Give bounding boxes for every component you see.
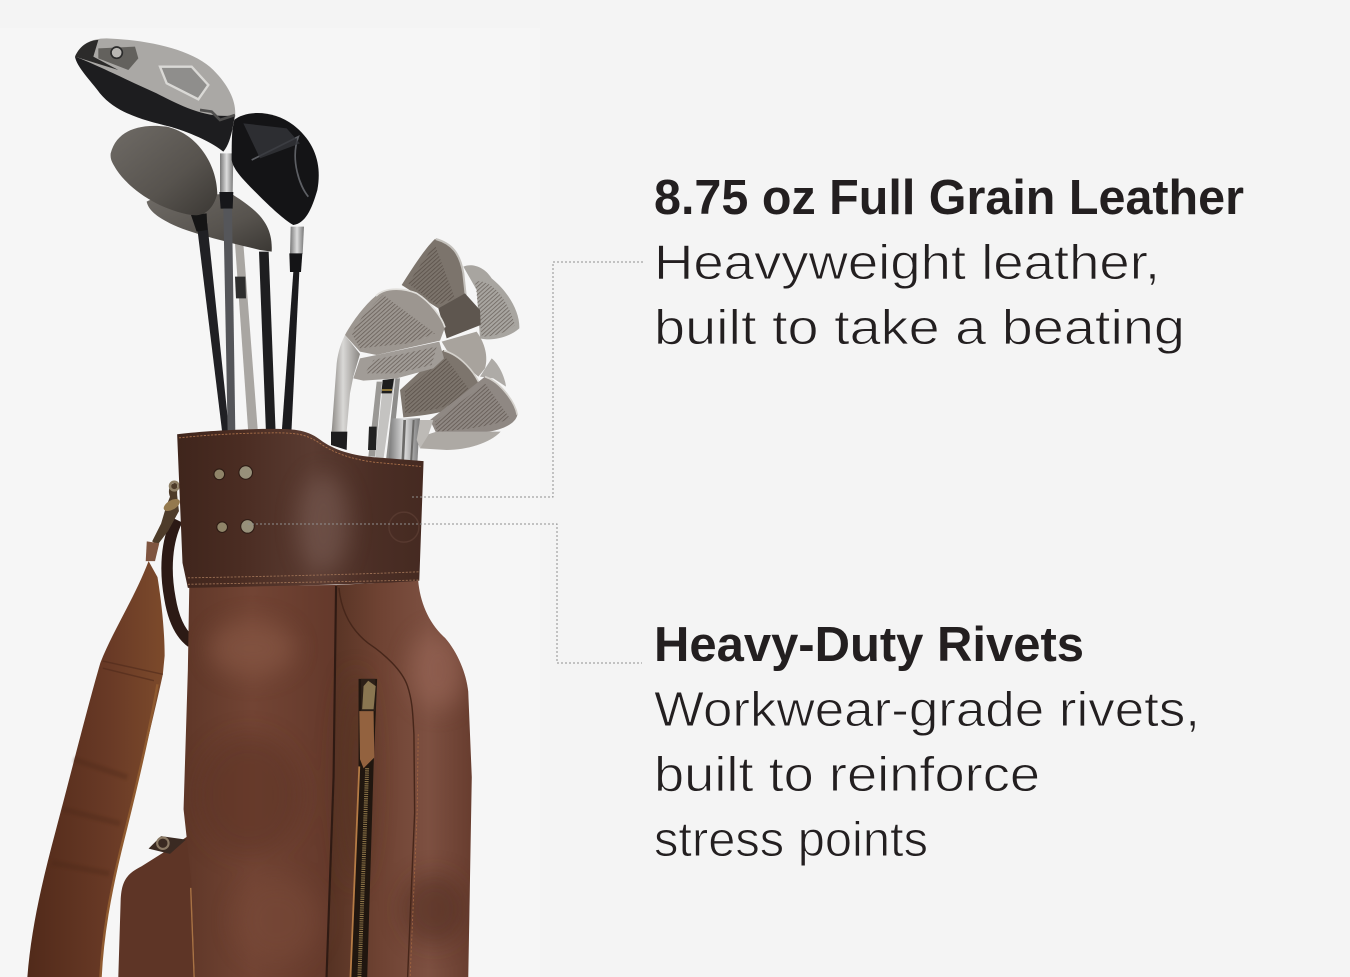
collar top stitching: [179, 433, 421, 466]
bag body left panel: [184, 585, 336, 977]
flap seam: [339, 588, 415, 977]
front wedge hosel black tip: [331, 432, 347, 450]
leather collar: [177, 429, 424, 588]
thin back wedge: [480, 358, 506, 387]
silver shaft band: [235, 277, 246, 298]
shoulder strap: [27, 561, 165, 977]
front wedge hosel: [332, 335, 360, 432]
leader line: leather: [412, 262, 645, 497]
rear right wedge: [463, 265, 519, 339]
golf bag: [27, 429, 472, 977]
leather mottling: [195, 620, 466, 963]
callout: heavy-duty rivets: [654, 618, 1200, 867]
collar highlight: [299, 474, 349, 574]
heading: rivets: Heavy-Duty Rivets: [654, 618, 1084, 672]
leader line: rivets: [248, 524, 642, 663]
side stitching: [410, 734, 418, 977]
brass clasp: [146, 482, 182, 561]
golf clubs: [75, 38, 319, 433]
driver head: [75, 38, 235, 152]
bottom wedge: [420, 432, 501, 450]
mid silver wedge: [442, 332, 486, 377]
description: rivets line 2: built to reinforce: [654, 748, 1040, 802]
callout: full grain leather: [654, 171, 1244, 355]
front wedge lower face: [353, 342, 444, 381]
side pocket: [118, 836, 195, 977]
rivets: [214, 466, 254, 533]
rear top wedge: [402, 239, 466, 308]
driver shaft: [219, 153, 235, 433]
collar logo stamp: [389, 512, 419, 542]
description: rivets line 1: Workwear-grade rivets,: [654, 683, 1200, 737]
black fairway wood: [232, 113, 319, 433]
zipper pull tab: [359, 711, 374, 768]
zipper: [350, 679, 377, 977]
wedge irons: [331, 239, 519, 463]
bag body right panel: [327, 581, 472, 977]
front wedge upper face: [345, 289, 445, 355]
center fold line: [326, 586, 336, 977]
description: leather line 2: built to take a beating: [654, 301, 1185, 355]
silver shaft: [235, 243, 258, 433]
description: leather line 1: Heavyweight leather,: [654, 236, 1160, 290]
shafts under wedges: [368, 378, 420, 463]
bottom wedge neck: [417, 420, 433, 448]
heading: leather: 8.75 oz Full Grain Leather: [654, 171, 1244, 225]
rear middle wedge: [438, 293, 481, 338]
driver dark sole: [75, 57, 235, 152]
gray wood club: [111, 126, 229, 433]
collar bottom stitching: [188, 572, 419, 584]
description: rivets line 3: stress points: [654, 813, 928, 867]
lower wedge: [430, 377, 517, 434]
lower middle wedge: [400, 350, 481, 417]
back wood club: [147, 194, 276, 433]
photo panel background: [0, 28, 540, 977]
braided handle: [167, 520, 191, 642]
